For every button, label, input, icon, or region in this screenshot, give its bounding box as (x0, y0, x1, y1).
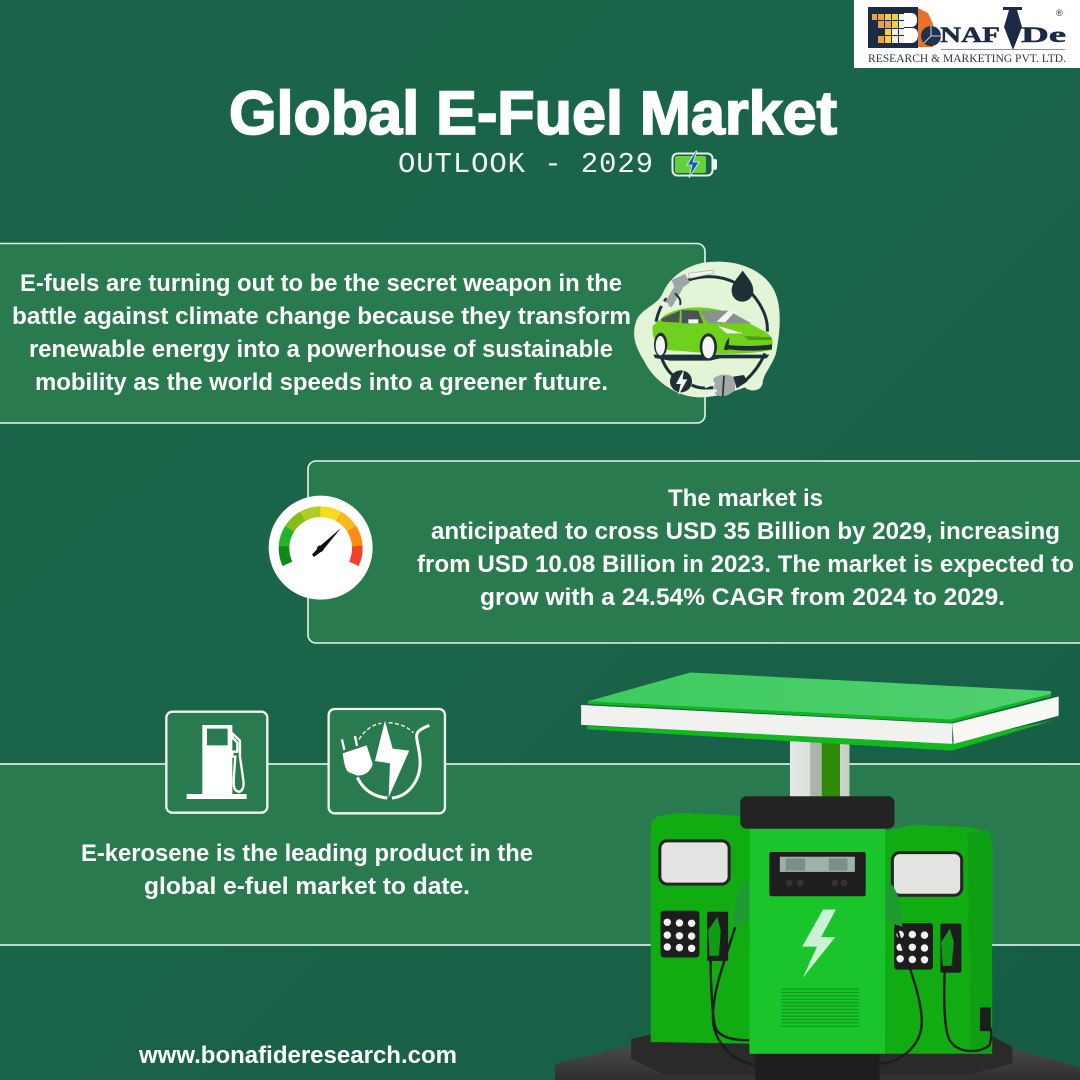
title: Global E-Fuel Market (229, 79, 837, 147)
column (790, 739, 849, 797)
intro text (12, 270, 631, 396)
bolt circle (670, 370, 692, 392)
intro text: renewable energy into a powerhouse of sustainable (29, 336, 613, 363)
ring (656, 277, 767, 388)
panel: introduction (0, 244, 705, 423)
intro text: mobility as the world speeds into a greener future. (35, 369, 608, 396)
panel: market size (308, 461, 1080, 643)
subtitle: OUTLOOK - 2029 (398, 148, 653, 181)
panel: e-kerosene band (0, 764, 1080, 945)
vent (781, 989, 859, 1027)
plug (705, 375, 747, 397)
display (769, 852, 866, 896)
bolt (802, 909, 836, 978)
right pump (880, 825, 992, 1064)
icon: plug and bolt box (329, 709, 445, 813)
band text: global e-fuel market to date. (144, 873, 470, 900)
intro text: E-fuels are turning out to be the secret weapon in the (20, 270, 622, 297)
canopy (581, 673, 1059, 751)
market text (417, 485, 1074, 611)
plug (343, 745, 373, 775)
logo (854, 0, 1080, 68)
icon: fuel pump box (166, 712, 267, 813)
icon: green car with fuel and plug cycle (634, 262, 780, 397)
centre pump (740, 796, 894, 1080)
platform (555, 1045, 1080, 1080)
cord (357, 725, 429, 798)
fuel nozzle (659, 270, 713, 309)
logo: ® (1056, 8, 1063, 18)
illustration: charging station (555, 673, 1080, 1080)
icon: battery (672, 151, 717, 178)
market text: The market is (668, 485, 823, 512)
logo: De (1021, 22, 1066, 47)
website url: www.bonafideresearch.com (138, 1042, 457, 1069)
band text: E-kerosene is the leading product in the (81, 840, 533, 867)
band text (81, 840, 533, 900)
car (653, 307, 773, 361)
market text: grow with a 24.54% CAGR from 2024 to 2029. (480, 584, 1005, 611)
logo: RESEARCH & MARKETING PVT. LTD. (868, 53, 1066, 65)
intro text: battle against climate change because they transform (12, 303, 631, 330)
logo: NAF (940, 22, 1000, 47)
left pump (651, 813, 756, 1065)
icon: gauge (269, 496, 373, 600)
market text: from USD 10.08 Billion in 2023. The market is expected to (417, 551, 1074, 578)
oil drop (732, 271, 753, 302)
market text: anticipated to cross USD 35 Billion by 2029, increasing (431, 518, 1060, 545)
bolt (375, 721, 409, 797)
needle (312, 528, 341, 557)
